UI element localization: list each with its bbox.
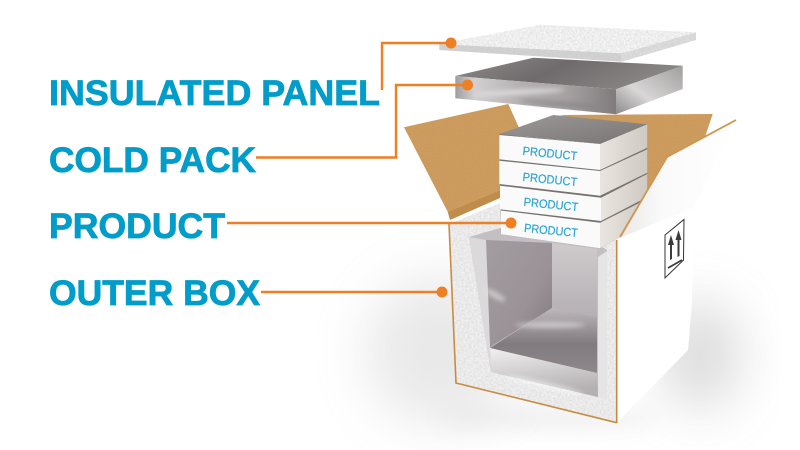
label: cold pack: COLD PACK — [49, 140, 256, 180]
product box 2: PRODUCT — [522, 170, 579, 189]
product box 4 — [501, 199, 647, 248]
icon: this way up arrows — [665, 220, 684, 278]
label: insulated panel: INSULATED PANEL — [49, 73, 380, 113]
outer box: inner cardboard flaps — [404, 104, 713, 225]
ground shadow — [365, 275, 740, 425]
product box 3 — [500, 174, 647, 221]
outer box: white side and flap — [617, 120, 736, 423]
product box 2 — [499, 149, 647, 196]
label: product: PRODUCT — [49, 206, 225, 246]
product box 1: PRODUCT — [522, 144, 579, 163]
label: product — [49, 206, 516, 246]
insulated panel — [439, 25, 696, 62]
label: insulated panel — [49, 38, 456, 113]
product stack — [499, 115, 647, 248]
product box 3: PRODUCT — [523, 195, 580, 214]
product box 1 — [499, 124, 647, 170]
label: outer box — [49, 273, 448, 313]
outer box: insulation and cavity — [449, 203, 617, 423]
cold pack — [455, 58, 683, 114]
label: cold pack — [49, 80, 473, 180]
product box 4: PRODUCT — [523, 221, 579, 240]
label: outer box: OUTER BOX — [49, 273, 260, 313]
